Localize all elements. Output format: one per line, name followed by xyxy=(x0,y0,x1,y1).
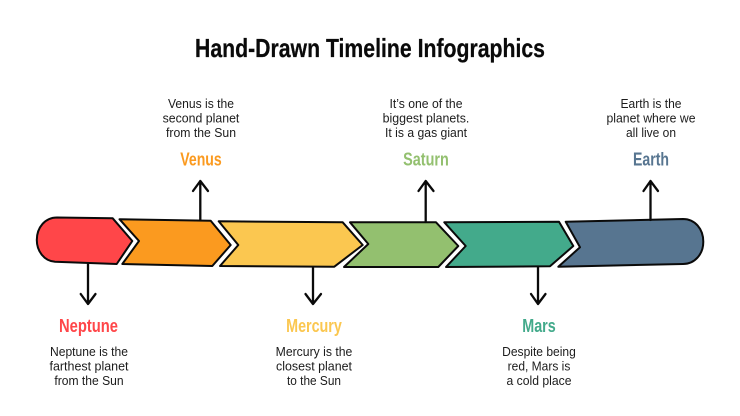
label: Earth: all live on xyxy=(626,125,676,140)
label: Saturn: It’s one of the xyxy=(390,96,462,111)
label: Mars: a cold place xyxy=(506,373,572,388)
label: Venus: second planet xyxy=(163,110,240,126)
label: Earth: Earth xyxy=(633,149,669,170)
arrow: Earth xyxy=(644,181,658,220)
label: Saturn: biggest planets. xyxy=(383,110,469,126)
label: Earth: planet where we xyxy=(606,110,696,126)
label: Neptune: from the Sun xyxy=(54,373,124,388)
label: Saturn xyxy=(383,96,469,170)
label: Neptune xyxy=(50,315,129,388)
segment: Neptune xyxy=(37,218,132,264)
label: Mars: Mars xyxy=(522,315,556,336)
label: Mercury xyxy=(276,315,352,388)
label: Venus: Venus xyxy=(180,149,222,170)
label: Venus: from the Sun xyxy=(166,125,236,140)
label: Neptune: Neptune is the xyxy=(50,344,128,359)
arrow: Venus xyxy=(193,181,208,220)
arrow: Mars xyxy=(531,267,546,304)
label: Saturn: It is a gas giant xyxy=(385,125,467,140)
segment: Venus xyxy=(120,219,231,266)
arrow: Mercury xyxy=(306,267,321,304)
segment: Mars xyxy=(444,222,573,267)
label: Mercury: Mercury is the xyxy=(276,344,352,359)
title: Hand-Drawn Timeline Infographics xyxy=(195,33,545,63)
segment: Saturn xyxy=(344,222,458,267)
label: Mercury: to the Sun xyxy=(287,373,341,388)
label: Mars xyxy=(502,315,576,388)
label: Venus: Venus is the xyxy=(168,96,234,111)
label: Earth: Earth is the xyxy=(620,96,682,111)
label: Mars: red, Mars is xyxy=(508,358,571,374)
label: Venus xyxy=(163,96,240,170)
label: Neptune: farthest planet xyxy=(50,358,129,374)
label: Neptune: Neptune xyxy=(59,315,118,336)
label: Saturn: Saturn xyxy=(403,149,449,170)
segment: Mercury xyxy=(219,221,363,267)
arrow: Saturn xyxy=(418,181,434,222)
label: Earth xyxy=(606,96,696,170)
segment: Earth xyxy=(558,219,703,267)
timeline bar xyxy=(37,218,703,267)
arrow: Neptune xyxy=(81,264,96,304)
label: Mercury: closest planet xyxy=(276,358,352,374)
label: Mercury: Mercury xyxy=(286,315,342,336)
label: Mars: Despite being xyxy=(502,344,576,359)
